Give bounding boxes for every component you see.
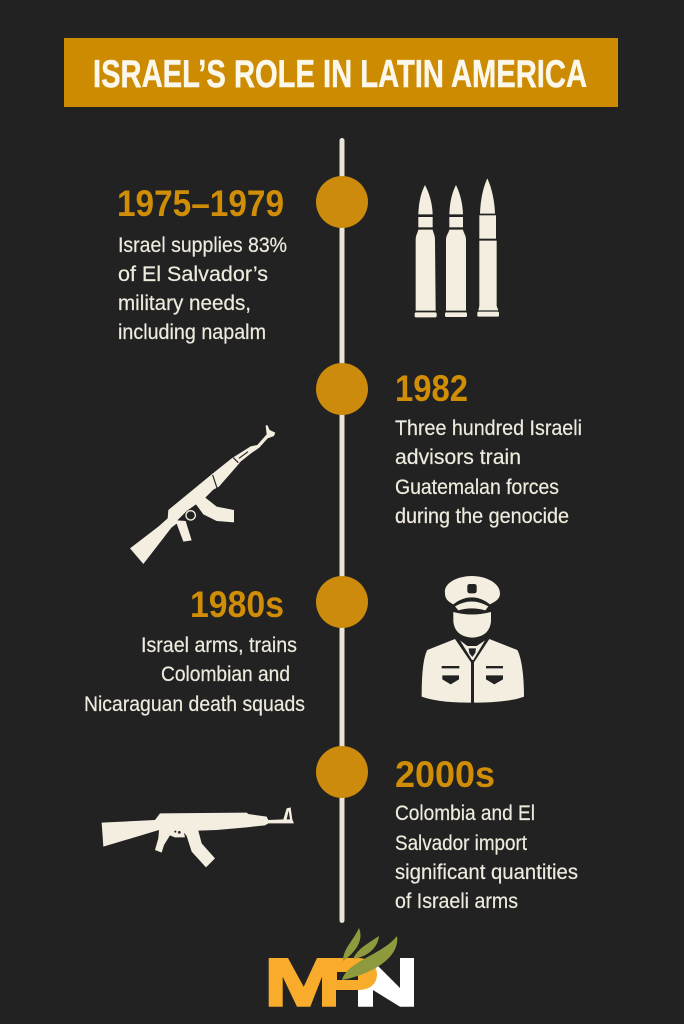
timeline marker: 2000s xyxy=(316,746,368,798)
logo letters M and P xyxy=(269,958,377,1007)
timeline marker: 1980s xyxy=(316,576,368,628)
event: 1980s: Israel arms, trains xyxy=(141,634,297,657)
logo letter N xyxy=(358,958,414,1007)
icon: diagonal assault rifle xyxy=(130,425,275,564)
event: 2000s: significant quantities xyxy=(395,861,578,884)
event: 1982: Three hundred Israeli xyxy=(395,417,582,440)
event: 1975–1979: military needs, xyxy=(118,292,251,315)
event: 1982 xyxy=(395,368,582,528)
event: 1975–1979: of El Salvador’s xyxy=(118,263,268,286)
event: 1980s: Colombian and xyxy=(161,663,290,686)
title banner xyxy=(64,38,618,107)
event: 2000s: Salvador import xyxy=(395,832,527,855)
timeline spine xyxy=(340,138,344,923)
timeline marker: 1975–1979 xyxy=(316,176,368,228)
event: 1982: advisors train xyxy=(395,446,521,469)
icon: horizontal assault rifle xyxy=(102,807,294,867)
icon: uniformed officer xyxy=(422,576,524,703)
event: 1982: Guatemalan forces xyxy=(395,476,559,499)
logo: MPN xyxy=(269,928,414,1007)
event: 1975–1979: Israel supplies 83% xyxy=(118,234,287,257)
event: 2000s xyxy=(395,754,578,913)
event: 1980s: 1980s xyxy=(190,584,284,625)
event: 1982: during the genocide xyxy=(395,505,569,528)
event: 2000s: of Israeli arms xyxy=(395,890,518,913)
logo olive leaves xyxy=(342,928,397,980)
timeline marker: 1982 xyxy=(316,363,368,415)
event: 1980s xyxy=(84,584,305,716)
event: 2000s: 2000s xyxy=(395,754,495,795)
event: 1975–1979: including napalm xyxy=(118,321,266,344)
event: 1975–1979: 1975–1979 xyxy=(117,183,284,224)
event: 1975–1979 xyxy=(117,183,287,344)
event: 2000s: Colombia and El xyxy=(395,802,535,825)
event: 1982: 1982 xyxy=(395,368,468,409)
event: 1980s: Nicaraguan death squads xyxy=(84,693,305,716)
icon: three bullets xyxy=(415,178,499,317)
